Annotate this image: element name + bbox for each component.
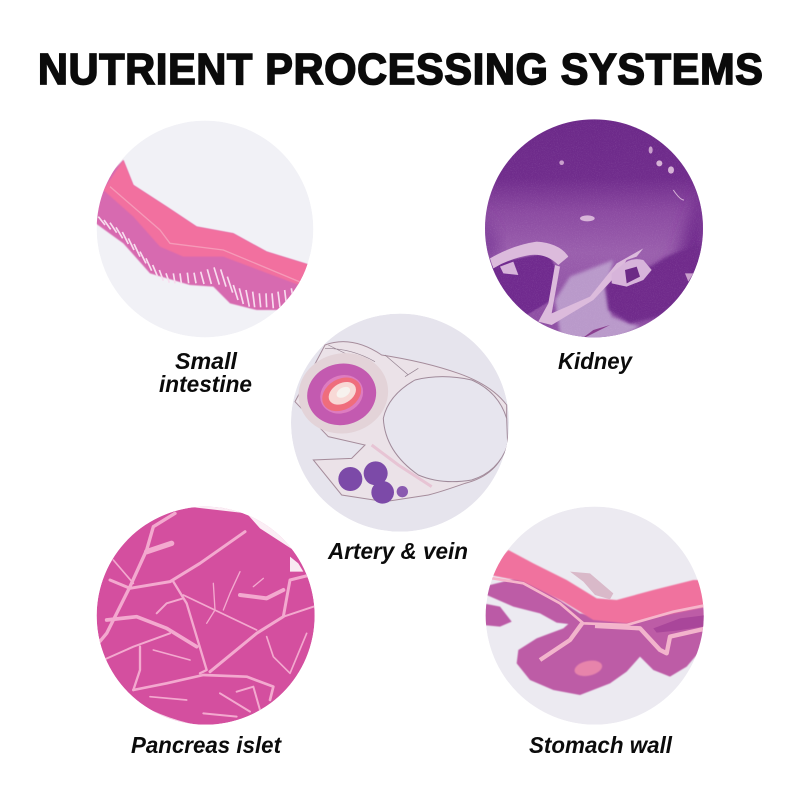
label: small intestine: Small: [175, 348, 238, 374]
micrograph: pancreas islet: [97, 503, 323, 733]
micrograph: stomach wall: [483, 507, 707, 725]
micrograph: kidney: [480, 117, 713, 343]
panel: stomach wall: [483, 507, 707, 758]
label: kidney: Kidney: [558, 348, 633, 374]
label: small intestine: intestine: [159, 371, 252, 397]
panel: pancreas islet: [97, 503, 323, 758]
label: artery and vein: Artery & vein: [327, 538, 468, 564]
panel: kidney: [480, 117, 713, 374]
label: pancreas islet: Pancreas islet: [131, 732, 282, 758]
panel: artery and vein: [291, 314, 509, 564]
micrograph: small intestine: [93, 121, 313, 337]
micrograph: artery and vein: [291, 314, 509, 532]
panel: small intestine: [93, 121, 313, 397]
title: NUTRIENT PROCESSING SYSTEMS: [38, 45, 764, 94]
label: small intestine: [159, 348, 252, 397]
label: stomach wall: Stomach wall: [529, 732, 673, 758]
